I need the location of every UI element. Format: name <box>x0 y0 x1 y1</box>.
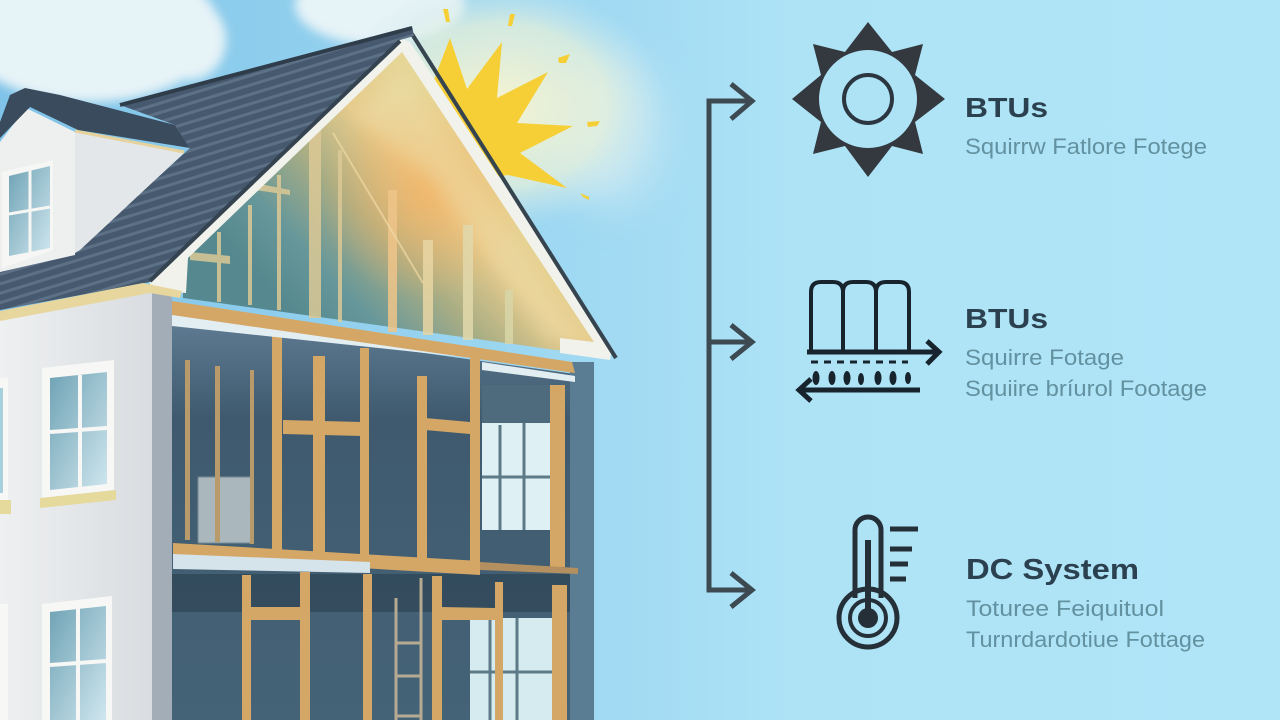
icon: radiator with arrows <box>799 282 939 401</box>
top beam <box>172 301 575 373</box>
house illustration <box>0 26 616 720</box>
window left partial <box>0 378 11 514</box>
bracket arrows connector <box>709 84 752 607</box>
white ceiling strips <box>172 315 472 358</box>
text block: DC System: Turnrdardotiue Fottage <box>966 627 1205 652</box>
text block: BTUs 1 <box>965 92 1207 159</box>
text block: DC System <box>966 554 1205 652</box>
main roof <box>0 26 414 310</box>
text block: BTUs 2: Squirre Fotage <box>965 345 1124 370</box>
dormer <box>0 88 190 272</box>
text block: DC System: Toturee Feiquituol <box>966 596 1164 621</box>
text block: DC System: DC System <box>966 554 1139 586</box>
house wall left <box>0 292 172 720</box>
dormer window <box>2 160 53 268</box>
cutaway floor interior <box>172 318 575 720</box>
clouds <box>0 0 660 205</box>
attic gable <box>183 48 608 352</box>
text block: BTUs 2: Squiire bríurol Footage <box>965 376 1207 401</box>
right corner column <box>570 362 594 720</box>
eave trim <box>0 283 182 321</box>
white gable trim <box>148 38 612 360</box>
wood framing <box>173 328 578 720</box>
icon: sun gear <box>792 22 945 177</box>
text block: BTUs 1: BTUs <box>965 92 1048 123</box>
text block: BTUs 2: BTUs <box>965 303 1048 334</box>
ladder <box>396 578 421 720</box>
window first floor <box>40 360 116 508</box>
window ground floor <box>0 596 112 720</box>
icon: thermometer <box>839 517 918 647</box>
text block: BTUs 2 <box>965 303 1207 401</box>
sun glow <box>335 0 665 230</box>
icon: sun behind roof <box>430 9 600 200</box>
text block: BTUs 1: Squirrw Fatlore Fotege <box>965 134 1207 159</box>
